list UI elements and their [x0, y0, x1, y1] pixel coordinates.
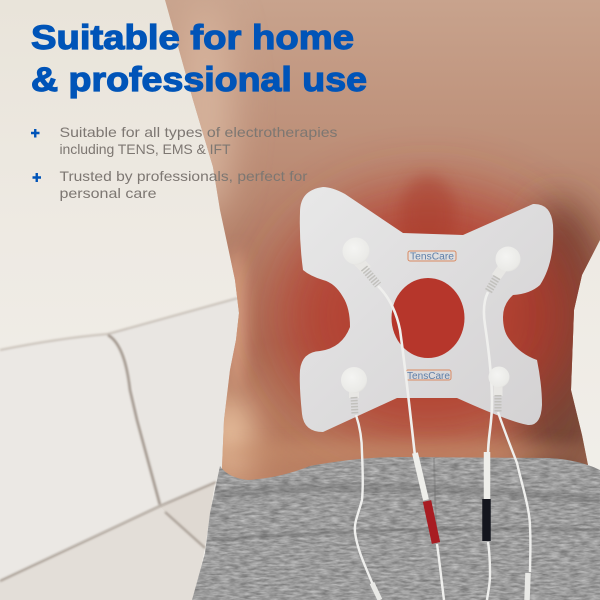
bullet 1: electrotherapies: including TENS, EMS & IFT	[60, 141, 231, 157]
logo: TensCare lower: TensCare	[407, 371, 450, 382]
bullet 1: electrotherapies	[31, 124, 338, 157]
electrode: lower right snap and lead	[488, 366, 530, 600]
electrode pad	[300, 187, 553, 432]
red circular cut-out	[392, 278, 464, 358]
title: Suitable for home	[31, 19, 354, 57]
black connector plug	[486, 452, 490, 600]
title: & professional use	[31, 61, 367, 99]
grey shorts	[180, 450, 600, 600]
icon: plus bullet	[32, 173, 41, 182]
photo: bare back	[150, 0, 600, 500]
electrode: upper left snap and lead	[342, 238, 415, 456]
bullet 2: professionals: Trusted by professionals, perfect for	[60, 168, 308, 184]
bullet 2: professionals: personal care	[60, 185, 157, 201]
electrode: upper right snap and lead	[484, 246, 520, 456]
bullet 1: electrotherapies: Suitable for all types of electrotherapies	[60, 124, 338, 140]
icon: plus bullet	[31, 129, 40, 138]
electrode: lower left snap and lead	[341, 367, 373, 585]
red connector plug	[415, 453, 444, 600]
logo: TensCare upper: TensCare	[410, 252, 454, 262]
bottom left lead connector	[372, 583, 380, 600]
bullet 2: professionals	[32, 168, 308, 201]
title	[31, 19, 367, 99]
